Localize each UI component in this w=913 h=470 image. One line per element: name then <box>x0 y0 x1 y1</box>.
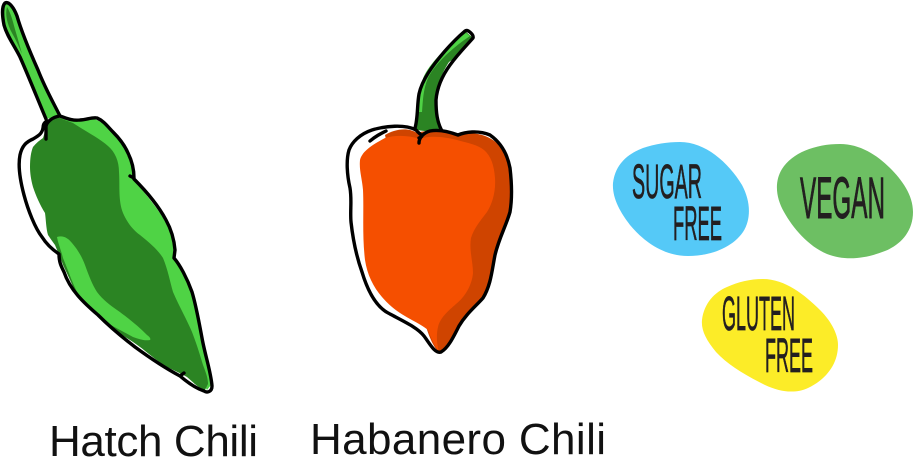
habanero outline <box>347 126 512 352</box>
illustration: habanero chili <box>347 31 512 353</box>
badge: sugar free: SUGAR <box>632 156 702 209</box>
vegan blob <box>777 144 913 258</box>
habanero bright orange body <box>360 136 495 352</box>
badge: gluten free <box>702 279 838 392</box>
hatch chili lower highlight <box>57 236 150 340</box>
badge: gluten free: FREE <box>765 330 813 383</box>
label: hatch chili: Hatch Chili <box>49 417 258 466</box>
illustration: hatch chili <box>3 3 212 392</box>
habanero stem <box>415 31 473 133</box>
hatch chili outline <box>19 116 212 392</box>
habanero dark orange body <box>385 129 511 353</box>
label: habanero chili: Habanero Chili <box>310 415 606 464</box>
badge: sugar free <box>613 142 749 256</box>
gluten free blob <box>702 279 838 392</box>
hatch chili dark green body <box>30 118 208 390</box>
sugar free blob <box>613 142 749 256</box>
badge: gluten free: GLUTEN <box>722 288 795 341</box>
badge: vegan <box>777 144 913 258</box>
badge: sugar free: FREE <box>673 198 722 251</box>
hatch chili stem <box>3 3 60 119</box>
hatch chili light green body <box>47 117 211 390</box>
